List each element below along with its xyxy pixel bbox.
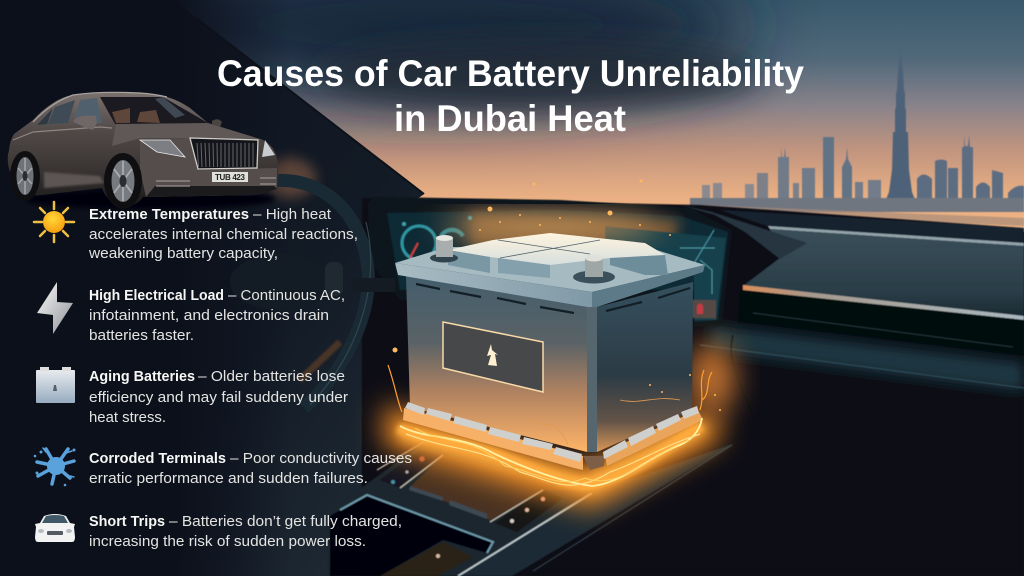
steering wheel (230, 180, 395, 408)
block front right (610, 255, 668, 275)
tray (330, 495, 493, 576)
block top (448, 233, 665, 265)
button panel right (495, 490, 563, 532)
text: aging batteries: Aging Batteries (89, 368, 195, 385)
cause: short trips (35, 513, 402, 550)
lower dash teal band (710, 325, 1024, 392)
battery base ledge (403, 408, 703, 470)
block front middle (498, 258, 550, 278)
sparks (392, 180, 721, 411)
cause: corroded terminals (34, 448, 412, 487)
license plate: TUB 423 (215, 173, 246, 182)
text: short trips (89, 513, 402, 550)
grille (190, 138, 258, 169)
luxury sedan (8, 92, 278, 209)
vent black band (738, 290, 1024, 356)
text: extreme temperatures: accelerates internal chemical reactions, (89, 226, 358, 243)
metal tabs (405, 402, 699, 462)
Dubai skyline (690, 18, 1024, 226)
title: Causes of Car Battery Unreliability (217, 53, 804, 94)
button panel top (380, 450, 443, 488)
text: extreme temperatures: – High heat (253, 206, 332, 223)
text: high electrical load: batteries faster. (89, 327, 194, 344)
front wheel (104, 153, 142, 209)
A-pillar and dark left cabin (0, 0, 424, 576)
windows (37, 97, 208, 125)
windshield sky (110, 0, 1024, 232)
car body (8, 92, 278, 207)
dashboard (362, 198, 1024, 576)
dash top surface (743, 229, 1024, 318)
text: short trips: – Batteries don’t get fully charged, (169, 513, 402, 530)
upper dash band (720, 210, 1024, 245)
text: aging batteries: heat stress. (89, 409, 166, 426)
battery (385, 180, 736, 508)
block front left (448, 250, 490, 273)
Burj Khalifa (883, 18, 918, 207)
rim front right (592, 265, 705, 307)
dust glow over screen (470, 212, 680, 250)
rear wheel (10, 151, 40, 201)
battery lid (395, 233, 705, 307)
vents (416, 284, 690, 313)
mirror (73, 116, 97, 130)
text: corroded terminals: – Poor conductivity causes (230, 450, 412, 467)
display screen (387, 210, 728, 322)
text: high electrical load: – Continuous AC, (228, 287, 345, 304)
side reflection (44, 172, 104, 188)
lower panel (380, 542, 473, 576)
headlights (140, 140, 275, 157)
front fascia (140, 138, 277, 197)
small display indicators (402, 216, 716, 318)
text: short trips: increasing the risk of sudden power loss. (89, 533, 366, 550)
glowing label (443, 322, 543, 392)
wire (731, 335, 752, 412)
rim top (395, 247, 705, 292)
center console (328, 438, 735, 576)
display frame (368, 197, 732, 327)
battery right face (597, 282, 693, 452)
bars (409, 486, 487, 519)
title (217, 53, 804, 139)
lower bumper (146, 186, 277, 197)
instrument display (368, 197, 732, 327)
text: high electrical load: High Electrical Load (89, 287, 224, 304)
teal outer band (458, 443, 735, 576)
air vent strip (743, 285, 1024, 320)
right display panel (605, 226, 726, 320)
icon: corrosion splat (34, 448, 75, 486)
text: high electrical load (89, 287, 345, 344)
orange touch panel (410, 455, 590, 520)
text: corroded terminals (89, 450, 412, 487)
text: short trips: Short Trips (89, 513, 165, 530)
console body (328, 438, 592, 576)
text: high electrical load: infotainment, and electronics drain (89, 307, 329, 324)
console trim lines (377, 438, 543, 522)
cause: aging batteries (36, 367, 348, 426)
dashboard base (362, 198, 1024, 576)
icon: white car (35, 514, 75, 542)
text: extreme temperatures (88, 206, 358, 262)
battery left face (406, 276, 587, 452)
electric arcs (388, 365, 712, 486)
hood (112, 123, 263, 146)
text: corroded terminals: Corroded Terminals (89, 450, 226, 467)
cause: high electrical load (37, 282, 345, 344)
text: aging batteries: – Older batteries lose (198, 368, 345, 385)
rim front left (395, 263, 592, 307)
text: aging batteries: efficiency and may fail suddeny under (89, 389, 348, 406)
text: extreme temperatures: weakening battery capacity, (88, 245, 278, 262)
button dots (391, 456, 545, 558)
text: corroded terminals: erratic performance and sudden failures. (89, 470, 368, 487)
speedometer gauge (402, 226, 463, 260)
text: aging batteries (89, 368, 348, 426)
terminals (430, 235, 615, 284)
text: extreme temperatures: Extreme Temperatures (89, 206, 249, 223)
orange glow around battery (385, 215, 736, 508)
belt line (13, 127, 112, 140)
cause: extreme temperatures (34, 202, 358, 262)
roof highlight (33, 92, 167, 122)
icon: lightning bolt (37, 282, 73, 334)
silver trim (768, 226, 1024, 246)
icon: battery (36, 367, 75, 403)
title: in Dubai Heat (394, 98, 626, 139)
icon: sun (34, 202, 74, 242)
battery corner (587, 302, 597, 452)
display hood (680, 205, 807, 259)
